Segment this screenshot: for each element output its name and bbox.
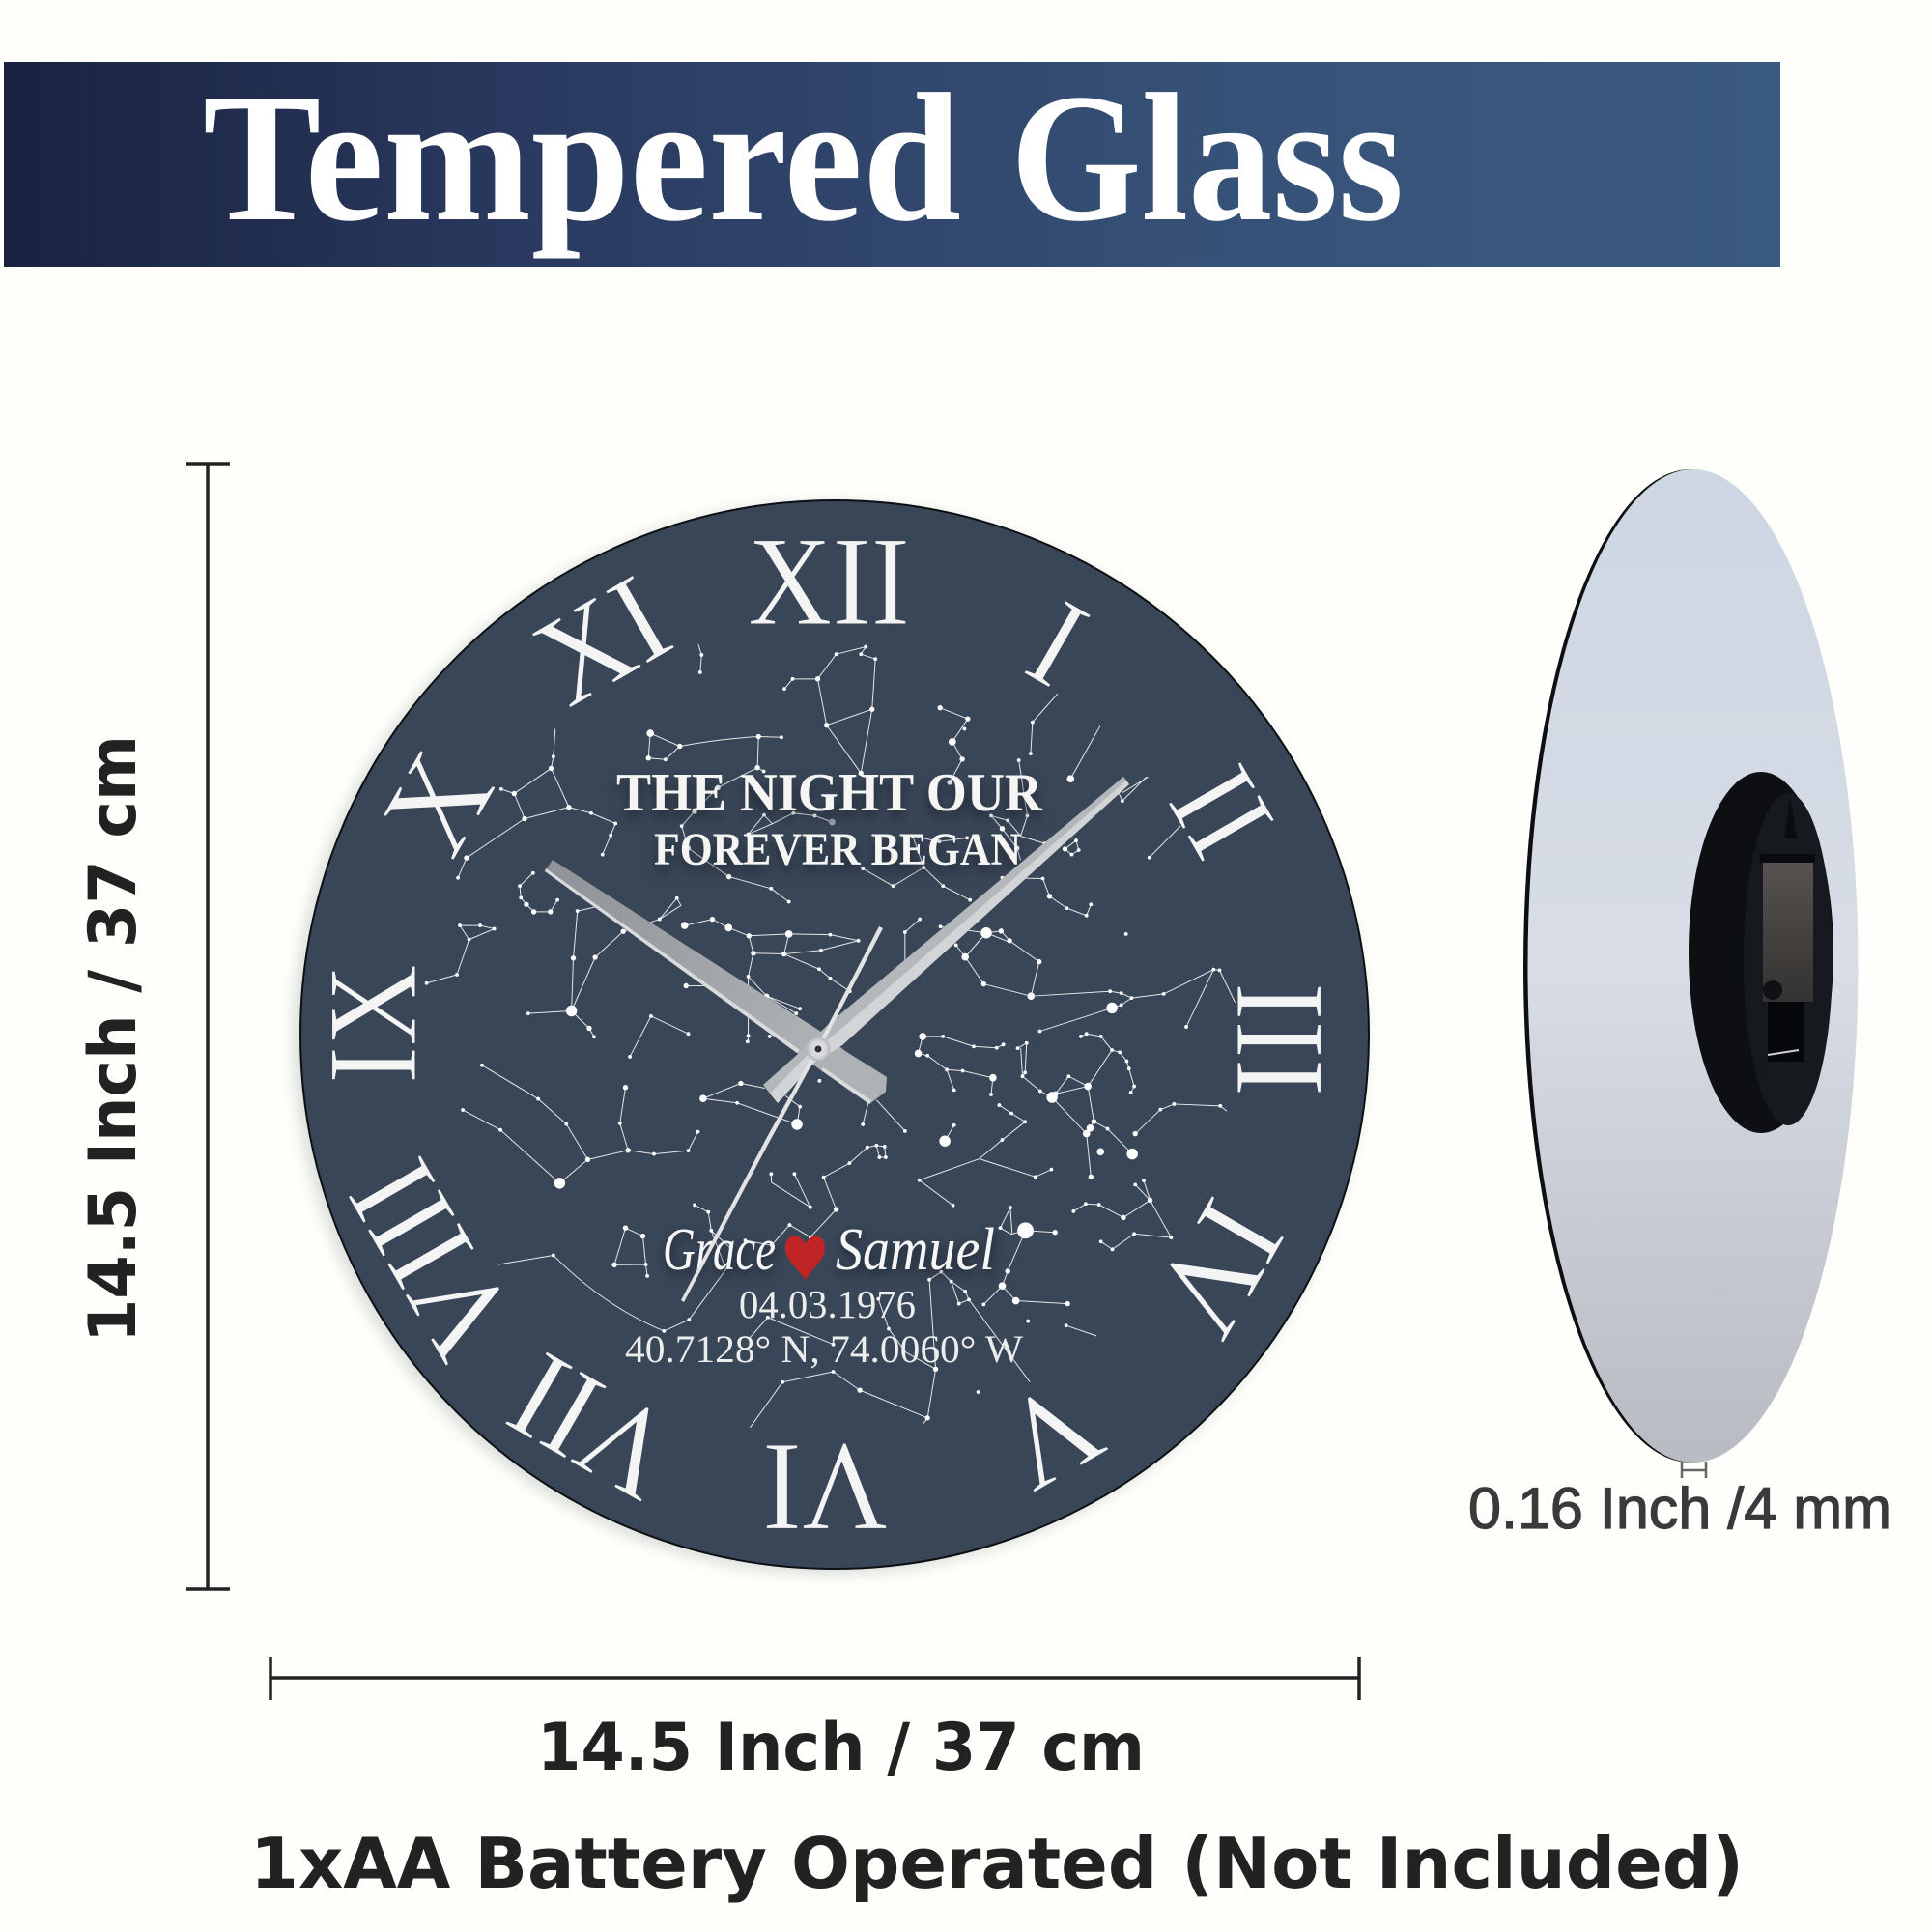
hour hand bbox=[545, 860, 887, 1104]
title bbox=[203, 57, 1404, 260]
movement bbox=[1760, 854, 1815, 1002]
numeral 1: I bbox=[1007, 572, 1109, 714]
coordinates: 40.7128° N, 74.0060° W bbox=[625, 1327, 1023, 1371]
width dimension bbox=[270, 1657, 1359, 1786]
glass edge bbox=[1523, 469, 1858, 1463]
name right: Samuel bbox=[836, 1217, 995, 1283]
height dimension bbox=[75, 464, 230, 1589]
numeral 12: XII bbox=[748, 510, 910, 652]
battery note: 1xAA Battery Operated (Not Included) bbox=[250, 1823, 1744, 1904]
numeral 7: VII bbox=[486, 1325, 697, 1529]
icon: heart bbox=[785, 1236, 825, 1280]
height label: 14.5 Inch / 37 cm bbox=[75, 735, 152, 1343]
minute hand bbox=[763, 777, 1129, 1103]
clock headline bbox=[616, 763, 1043, 875]
hanger notch bbox=[1784, 797, 1797, 838]
second hand bbox=[681, 926, 883, 1302]
numeral 9: IX bbox=[301, 964, 443, 1084]
mount body bbox=[1689, 772, 1833, 1133]
clock face bbox=[300, 500, 1369, 1569]
hub bbox=[806, 1037, 831, 1061]
names bbox=[663, 1217, 995, 1283]
title: Tempered bbox=[203, 57, 961, 260]
title: Glass bbox=[1010, 57, 1404, 260]
numeral 5: V bbox=[978, 1352, 1125, 1520]
numeral 10: X bbox=[354, 728, 521, 876]
headline line 2: FOREVER BEGAN bbox=[654, 824, 1021, 875]
thickness marker bbox=[1682, 1462, 1706, 1478]
mount face bbox=[1744, 793, 1833, 1125]
title banner bbox=[4, 57, 1780, 267]
star map bbox=[427, 644, 1236, 1428]
clock shadow bbox=[293, 502, 1365, 1575]
date: 04.03.1976 bbox=[739, 1282, 916, 1326]
numeral 6: VI bbox=[762, 1417, 888, 1559]
thickness label: 0.16 Inch /4 mm bbox=[1468, 1476, 1891, 1541]
clock hands bbox=[545, 777, 1129, 1302]
roman numerals bbox=[301, 510, 1351, 1559]
headline line 1: THE NIGHT OUR bbox=[616, 763, 1043, 823]
clock front view bbox=[293, 500, 1369, 1575]
name left: Grace bbox=[663, 1217, 776, 1283]
clock side view bbox=[1468, 469, 1891, 1541]
width label: 14.5 Inch / 37 cm bbox=[537, 1710, 1145, 1786]
numeral 11: XI bbox=[511, 547, 693, 733]
battery slot bbox=[1768, 1002, 1804, 1062]
numeral 8: VIII bbox=[320, 1137, 543, 1382]
numeral 2: II bbox=[1142, 743, 1303, 879]
numeral 3: III bbox=[1209, 982, 1351, 1096]
numeral 4: IV bbox=[1126, 1178, 1313, 1359]
clock mechanism bbox=[1689, 772, 1833, 1133]
back panel bbox=[1528, 469, 1859, 1463]
